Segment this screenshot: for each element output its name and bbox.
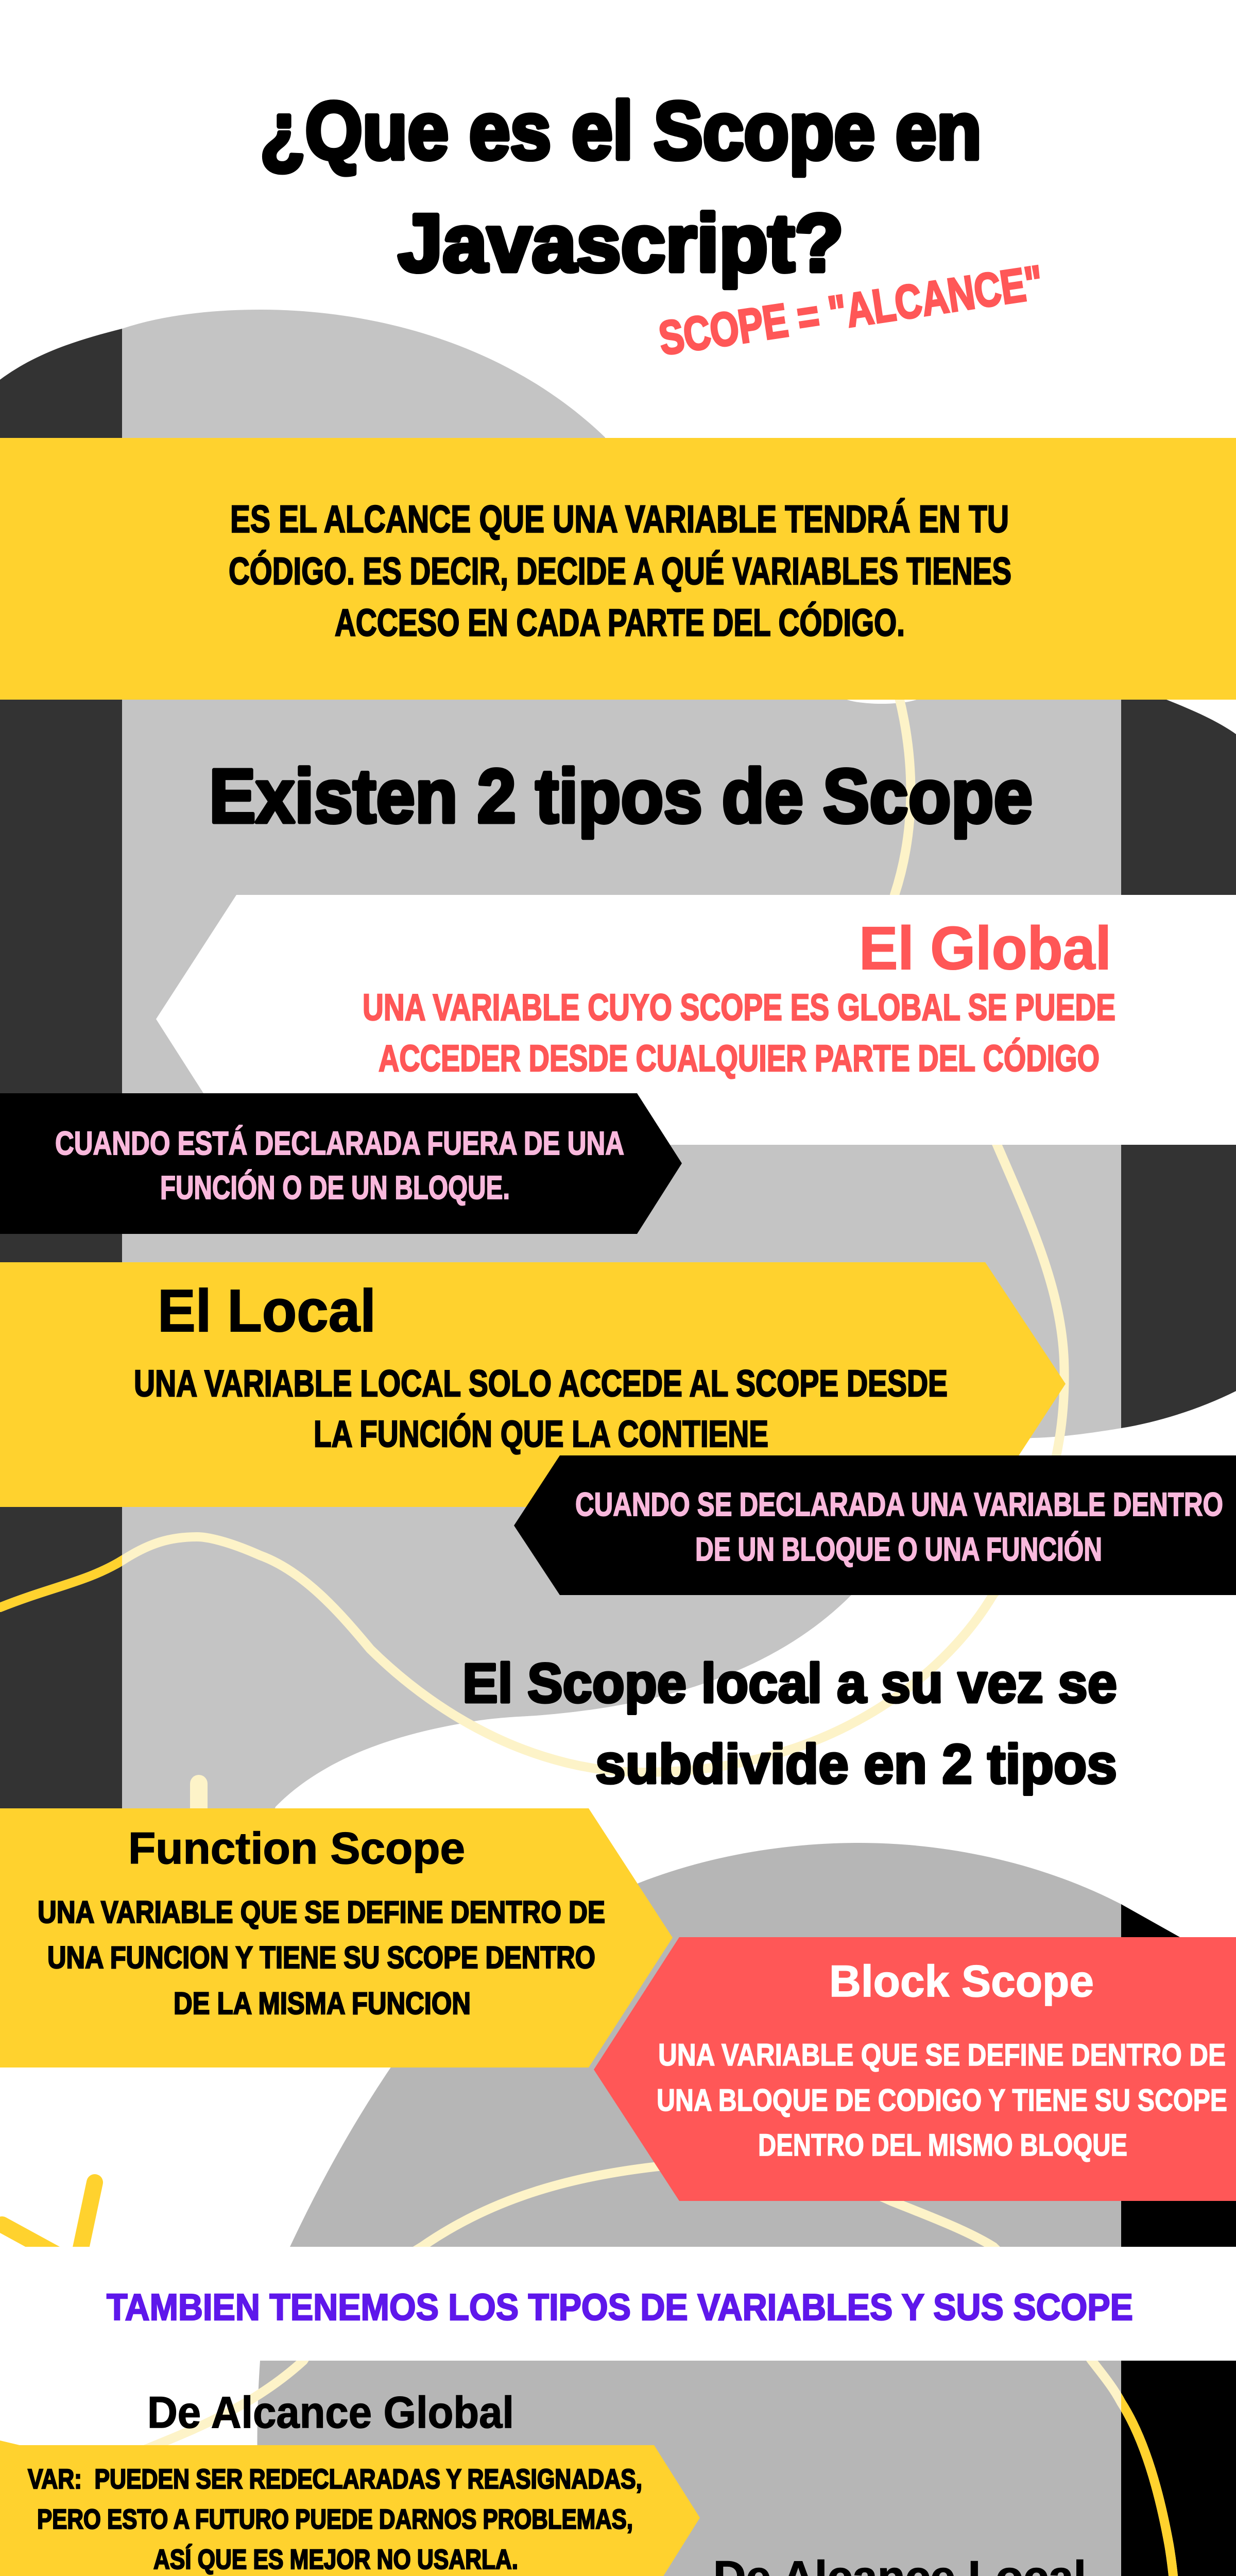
definition text: CÓDIGO. ES DECIR, DECIDE A QUÉ VARIABLES TIENES: [229, 550, 1011, 592]
left dark strip: [0, 329, 122, 1855]
right black strip bottom: [1121, 2361, 1236, 2576]
definition text: ES EL ALCANCE QUE UNA VARIABLE TENDRÁ EN TU: [230, 498, 1009, 540]
panel: global callout: [0, 1093, 682, 1234]
white band behind purple heading: [0, 2247, 1236, 2361]
el global heading: El Global: [859, 914, 1111, 982]
block scope text: DENTRO DEL MISMO BLOQUE: [758, 2128, 1127, 2162]
definition text: ACCESO EN CADA PARTE DEL CÓDIGO.: [335, 601, 905, 644]
function scope text: UNA FUNCION Y TIENE SU SCOPE DENTRO: [47, 1940, 595, 1975]
panel: definition band: [0, 438, 1236, 700]
global callout text: [55, 1125, 624, 1206]
function scope text: UNA VARIABLE QUE SE DEFINE DENTRO DE: [38, 1895, 605, 1929]
el global text: [363, 987, 1115, 1079]
el local text: [134, 1363, 948, 1455]
bottom gray section: [122, 2361, 1121, 2576]
local callout text: [575, 1486, 1223, 1568]
yellow check mark: [2, 2182, 95, 2277]
var text: PERO ESTO A FUTURO PUEDE DARNOS PROBLEMAS,: [37, 2504, 633, 2535]
panel: el local: [0, 1262, 1066, 1507]
var text: VAR: PUEDEN SER REDECLARADAS Y REASIGNADAS,: [28, 2464, 642, 2495]
global callout text: FUNCIÓN O DE UN BLOQUE.: [160, 1169, 510, 1206]
panel: var: [0, 2441, 700, 2576]
block scope text: [657, 2038, 1227, 2162]
function scope heading: Function Scope: [128, 1824, 465, 1873]
title: ¿Que es el Scope en: [260, 86, 982, 176]
global callout text: CUANDO ESTÁ DECLARADA FUERA DE UNA: [55, 1125, 624, 1162]
heading: scope local subdivide: [462, 1652, 1117, 1795]
panel: el global: [156, 895, 1236, 1145]
var text: ASÍ QUE ES MEJOR NO USARLA.: [153, 2544, 518, 2575]
function scope text: DE LA MISMA FUNCION: [174, 1986, 471, 2021]
definition text: [229, 498, 1011, 644]
subtitle: scope = alcance: SCOPE = "ALCANCE": [656, 256, 1046, 365]
title: Javascript?: [398, 198, 844, 289]
pale curve: long wave: [0, 696, 1065, 1772]
block scope heading: Block Scope: [829, 1957, 1094, 2006]
heading: scope local subdivide: El Scope local a su vez se: [462, 1652, 1117, 1714]
pale curves: [0, 696, 1177, 2576]
heading: existen 2 tipos: Existen 2 tipos de Scope: [209, 754, 1033, 839]
function scope text: [38, 1895, 605, 2021]
el local text: LA FUNCIÓN QUE LA CONTIENE: [314, 1413, 768, 1455]
lower gray blob: [290, 1843, 1121, 2247]
var text: [28, 2464, 642, 2575]
pale vertical stub: [190, 1784, 208, 1819]
right black shape: [1121, 1904, 1236, 2247]
small white bump under band: [842, 687, 922, 704]
right dark strip: [1121, 700, 1236, 1428]
panel: local callout: [514, 1455, 1236, 1595]
heading: scope local subdivide: subdivide en 2 tipos: [595, 1733, 1117, 1795]
local callout text: DE UN BLOQUE O UNA FUNCIÓN: [695, 1531, 1102, 1568]
top gray blob: [122, 310, 1121, 1855]
panel: block scope: [594, 1937, 1236, 2201]
title: [260, 86, 982, 289]
heading: tipos de variables: TAMBIEN TENEMOS LOS TIPOS DE VARIABLES Y SUS SCOPE: [107, 2287, 1133, 2328]
yellow parts of curves over strips: [0, 1537, 1177, 2576]
el local heading: El Local: [158, 1277, 376, 1344]
pale curve: lower arc: [103, 2164, 1177, 2576]
el local text: UNA VARIABLE LOCAL SOLO ACCEDE AL SCOPE DESDE: [134, 1363, 948, 1404]
panel: function scope: [0, 1808, 673, 2067]
heading: de alcance global: De Alcance Global: [147, 2388, 514, 2437]
